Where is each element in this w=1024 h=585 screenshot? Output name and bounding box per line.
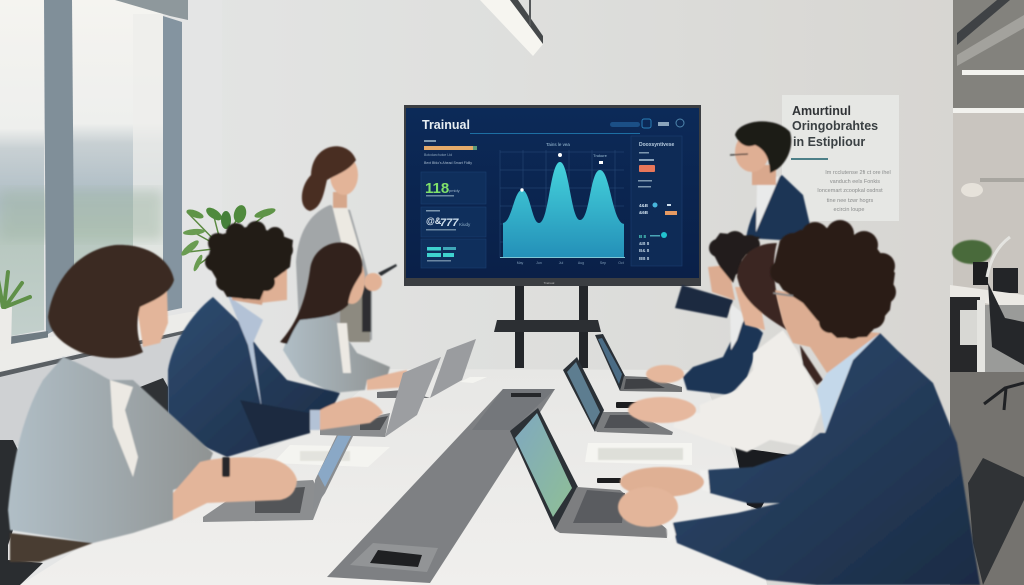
area chart: Tains le vea — [546, 142, 570, 147]
middle left laptop lid — [385, 357, 441, 437]
wall plant — [179, 204, 277, 272]
KPI panel — [421, 172, 486, 204]
middle right seated woman — [628, 243, 823, 452]
wall poster: Ioncemart zcoopkal osdnst — [817, 188, 883, 194]
mixed stats panel: @& — [426, 216, 442, 226]
monitor stand — [494, 285, 601, 368]
wall poster: Oringobrahtes — [792, 119, 878, 133]
right column panel: &B 8 — [639, 241, 650, 246]
papers on table — [273, 377, 692, 467]
mixed stats panel: Kiudy — [459, 222, 471, 227]
table — [20, 369, 767, 585]
area chart: Sep — [600, 261, 606, 265]
right column panel: B& 8 — [639, 248, 650, 253]
front right laptop — [510, 408, 668, 538]
pens on table — [597, 402, 640, 483]
front left laptop — [203, 408, 360, 522]
standing presenter woman — [296, 146, 397, 345]
window wall — [0, 0, 222, 370]
table centre strip — [327, 389, 555, 583]
wall poster: Im rcclutense 2fi ct ore ihel — [825, 170, 891, 176]
right column panel: B 8 — [639, 234, 646, 239]
back left laptop — [377, 339, 476, 398]
right office opening — [950, 0, 1024, 585]
right column panel: BB 8 — [639, 256, 650, 261]
middle right laptop — [563, 357, 673, 435]
mixed stats panel — [421, 207, 486, 237]
screen title: Trainual — [422, 118, 470, 132]
KPI panel: pmidy — [449, 188, 460, 193]
wall poster: vanduch eels Fonkis — [830, 179, 880, 185]
chair behind navy suit — [140, 378, 168, 430]
ceiling light — [480, 0, 543, 56]
front right man — [618, 220, 980, 585]
teal tag panel — [421, 239, 486, 268]
seated woman in gray blazer — [280, 242, 407, 393]
dark trousers under middle woman — [735, 447, 790, 510]
area chart: Jun — [536, 261, 542, 265]
progress panel: Bext Bfdo's Ahead Smart Fldlly — [424, 161, 472, 165]
mixed stats panel: 777 — [440, 217, 459, 229]
far left chair — [0, 440, 43, 585]
front left woman — [8, 245, 297, 562]
area chart: Oct — [618, 261, 624, 265]
monitor — [404, 105, 701, 286]
wall poster: Amurtinul — [792, 104, 851, 118]
wall poster — [782, 95, 899, 221]
potted plant on sill — [0, 272, 30, 351]
seated man in navy suit — [168, 221, 383, 457]
wall poster: in Estipliour — [793, 135, 865, 149]
right column panel — [631, 136, 682, 266]
front right chair — [968, 458, 1024, 585]
middle left laptop base — [320, 413, 390, 437]
back right laptop — [595, 334, 682, 392]
standing presenter man — [730, 121, 814, 242]
area chart: Jul — [559, 261, 563, 265]
right column panel: Dooxsyntivese — [639, 142, 675, 148]
progress panel: Botcdarchutce Ltd — [424, 153, 452, 157]
right column panel: 4&B — [639, 203, 649, 208]
wall poster: tine nee tzwr hogrs — [827, 198, 873, 204]
KPI panel: 118 — [425, 180, 449, 197]
area chart — [500, 142, 625, 265]
window sill — [0, 312, 222, 450]
right column panel: &6B — [639, 210, 649, 215]
back right seated man — [646, 231, 763, 395]
monitor: Trainual — [544, 281, 555, 285]
progress panel — [424, 140, 477, 165]
area chart: Trukure — [593, 153, 608, 158]
area chart: Aug — [578, 261, 584, 265]
area chart: May — [517, 261, 524, 265]
wall poster: ecircin loupe — [834, 207, 864, 213]
screen header controls — [610, 119, 684, 128]
